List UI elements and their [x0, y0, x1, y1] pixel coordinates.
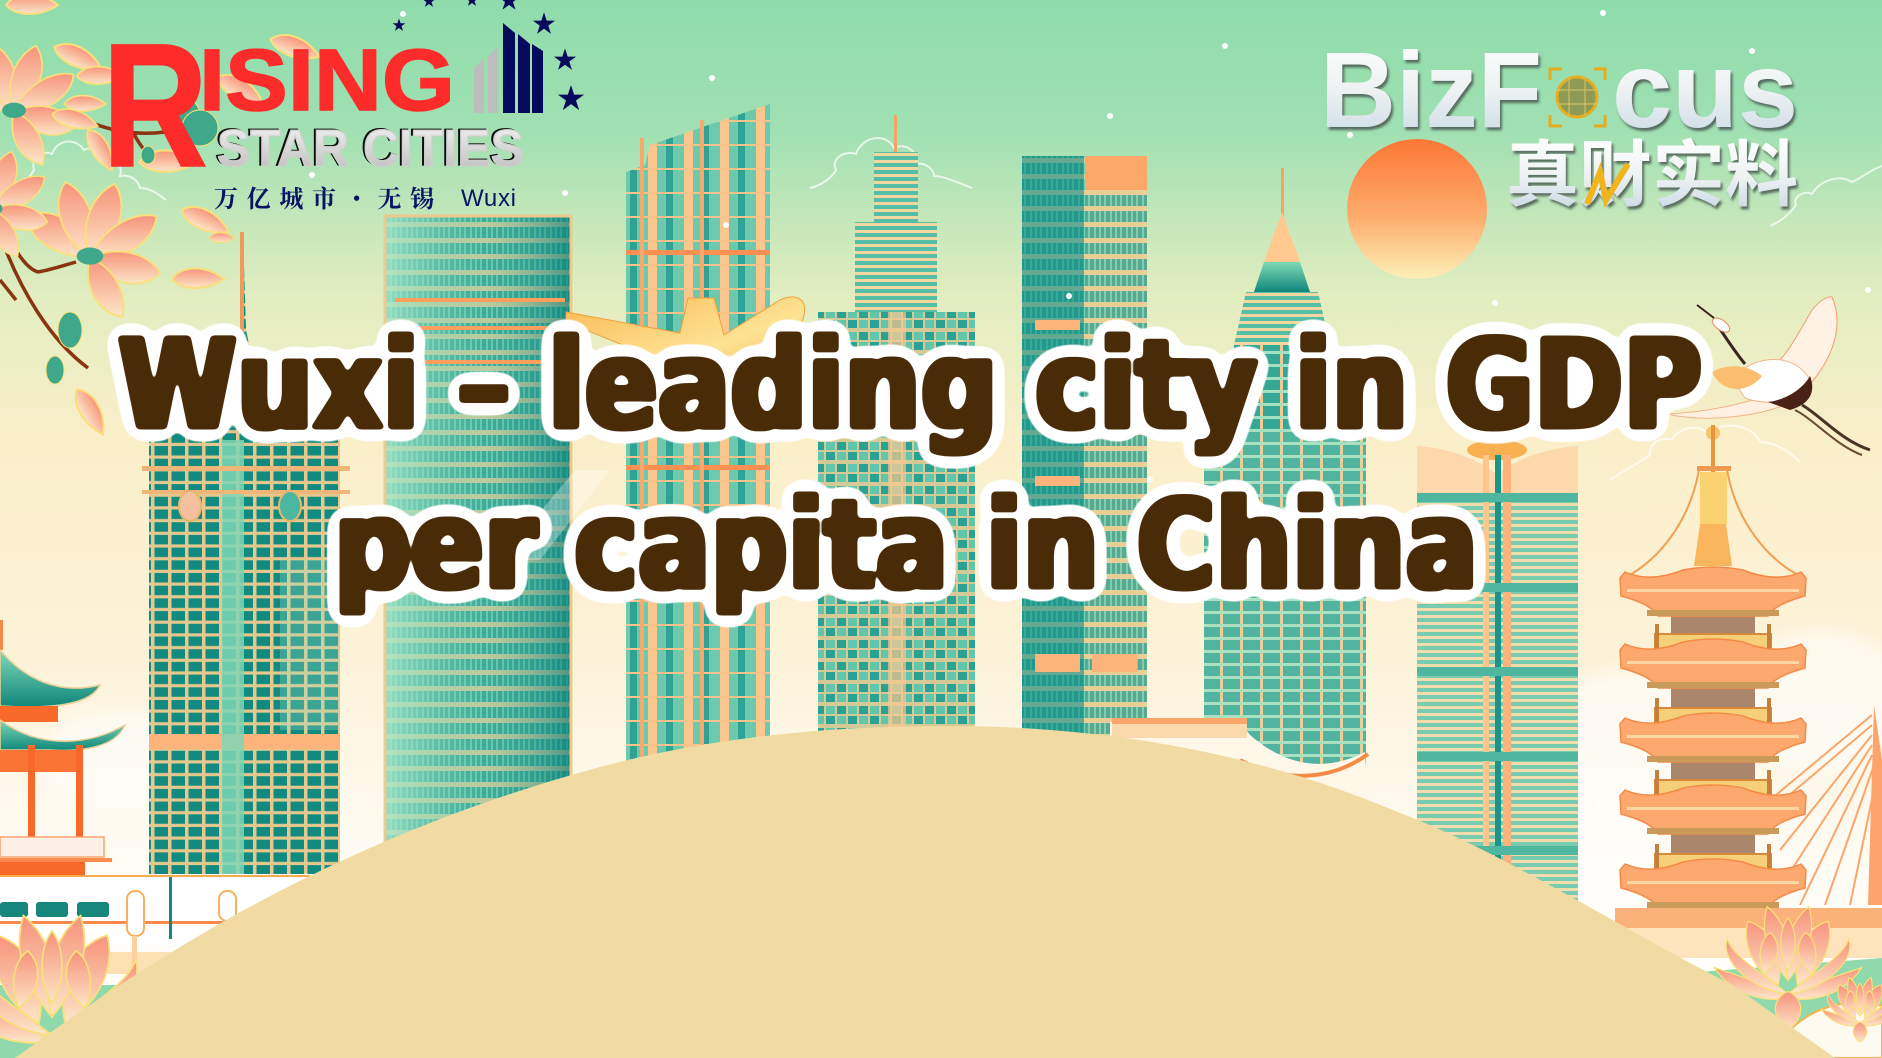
building: striped tower — [385, 216, 610, 856]
logo wordmark: Rising — [102, 8, 455, 204]
sun — [1347, 139, 1487, 279]
blossom branch and flowers — [0, 0, 323, 439]
logo wordmark: Rising: R — [102, 8, 208, 204]
logo icon: buildings and stars: ★ — [392, 17, 406, 33]
building: stepped tower — [818, 115, 975, 744]
title — [118, 313, 1702, 618]
lotus: far right — [1821, 977, 1882, 1042]
icon: rising arrow — [1587, 164, 1628, 204]
logo icon: buildings and stars — [392, 0, 585, 114]
cable-stayed bridge — [1760, 705, 1882, 905]
logo: BizFocus — [1320, 29, 1798, 216]
white dots — [309, 10, 1871, 483]
logo icon: buildings and stars: ★ — [557, 83, 585, 114]
foreground hill — [15, 726, 1835, 1058]
icon: focus globe — [1550, 69, 1605, 126]
high-speed train — [0, 875, 310, 1058]
logo: Rising Star Cities — [102, 0, 585, 213]
Chinese wordmark: 真财实料 — [1506, 136, 1798, 216]
logo icon: buildings and stars: ★ — [553, 47, 577, 74]
wordmark: cus — [1612, 29, 1798, 150]
soft clouds around pagoda — [40, 630, 1882, 920]
airplane — [566, 297, 805, 382]
building: teal block tower — [1022, 156, 1147, 744]
lotus: bottom left — [0, 916, 153, 1058]
logo city name: Wuxi — [461, 185, 516, 212]
crane — [1667, 297, 1870, 455]
logo icon: buildings and stars: ★ — [532, 11, 556, 38]
building: twin tower — [142, 232, 350, 874]
pagoda — [1620, 425, 1806, 908]
left pavilion — [0, 620, 125, 875]
title: per capita in China — [334, 473, 1478, 618]
building: low orange hall — [1110, 718, 1368, 800]
building: slanted tower — [626, 104, 770, 772]
lotus: bottom right — [1714, 907, 1862, 1058]
logo wordmark: Rising: ISING — [199, 32, 455, 129]
bridge deck and right shore — [1615, 908, 1882, 1058]
wordmark: BizF — [1320, 29, 1542, 150]
logo subtitle: 万亿城市・无锡 — [214, 186, 434, 213]
building: right tower with fan top — [1417, 440, 1578, 905]
logo wordmark: Star Cities: STAR CITIES — [217, 120, 524, 178]
building: spire tower — [1204, 168, 1366, 792]
wordmark — [1320, 29, 1798, 150]
clouds behind skyline — [14, 138, 1882, 480]
